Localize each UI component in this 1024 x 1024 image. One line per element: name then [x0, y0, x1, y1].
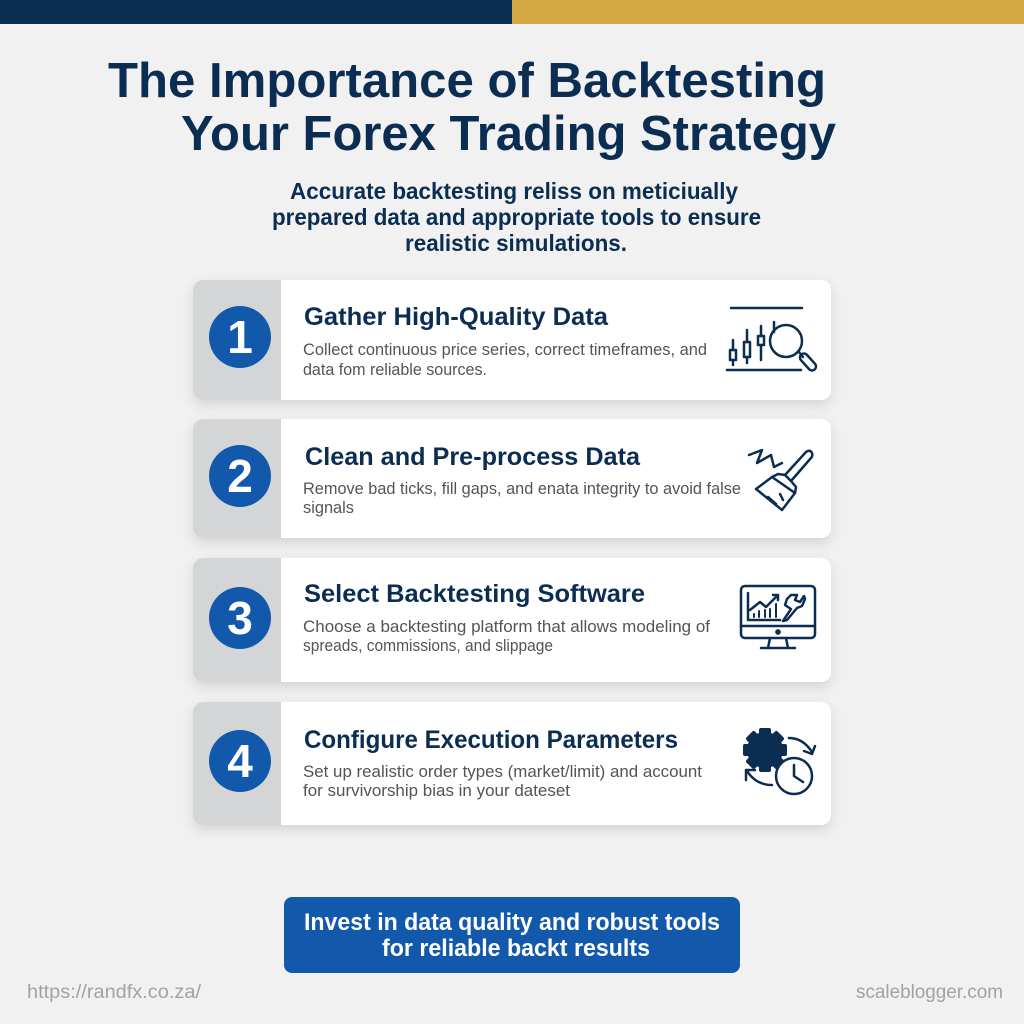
step 2 description: Remove bad ticks, fill gaps, and enata integrity to avoid false [303, 479, 741, 498]
icon: monitor with chart and wrench [741, 586, 815, 648]
title [108, 54, 836, 161]
step 3 description [303, 617, 710, 655]
panel: step 1 [193, 280, 831, 400]
callout [284, 897, 740, 973]
step 1 number: 1 [227, 311, 253, 363]
panel: step 4 [193, 702, 831, 825]
title: The Importance of Backtesting [108, 54, 826, 108]
title: Your Forex Trading Strategy [181, 107, 836, 161]
step 4 number [209, 730, 271, 792]
step 4 heading: Configure Execution Parameters [304, 726, 678, 754]
icon: gear and clock [743, 728, 815, 794]
step 2 heading: Clean and Pre-process Data [305, 443, 641, 471]
step 3 number [209, 587, 271, 649]
step 3 heading: Select Backtesting Software [304, 580, 645, 608]
step 2 number [209, 445, 271, 507]
step 3 number: 3 [227, 592, 253, 644]
step 2 number: 2 [227, 450, 253, 502]
subtitle: Accurate backtesting reliss on meticiually [290, 178, 738, 204]
step 1 description [303, 340, 707, 379]
footer: brand: scaleblogger.com [856, 982, 1003, 1003]
step 1 description: data fom reliable sources. [303, 360, 487, 379]
step 2 description [303, 479, 741, 517]
subtitle: realistic simulations. [405, 230, 627, 256]
callout: Invest in data quality and robust tools [304, 909, 720, 936]
step 4 number: 4 [227, 735, 253, 787]
callout: for reliable backt results [382, 935, 650, 962]
footer: source url: https://randfx.co.za/ [27, 982, 202, 1003]
panel: step 2 [193, 419, 831, 538]
subtitle: prepared data and appropriate tools to ensure [272, 204, 761, 230]
top colour bar [0, 0, 1024, 24]
step 4 description: for survivorship bias in your dateset [303, 781, 570, 800]
step 1 heading: Gather High-Quality Data [304, 303, 609, 331]
icon: candlesticks and magnifier [727, 308, 818, 372]
step 1 description: Collect continuous price series, correct timeframes, and [303, 340, 707, 359]
panel: step 3 [193, 558, 831, 682]
subtitle [272, 178, 761, 256]
step 2 description: signals [303, 498, 354, 517]
step 1 number [209, 306, 271, 368]
icon: broom [749, 450, 812, 510]
step 4 description [303, 762, 702, 800]
step 3 description: Choose a backtesting platform that allows modeling of [303, 617, 710, 636]
step 4 description: Set up realistic order types (market/limit) and account [303, 762, 702, 781]
step 3 description: spreads, commissions, and slippage [303, 636, 553, 655]
